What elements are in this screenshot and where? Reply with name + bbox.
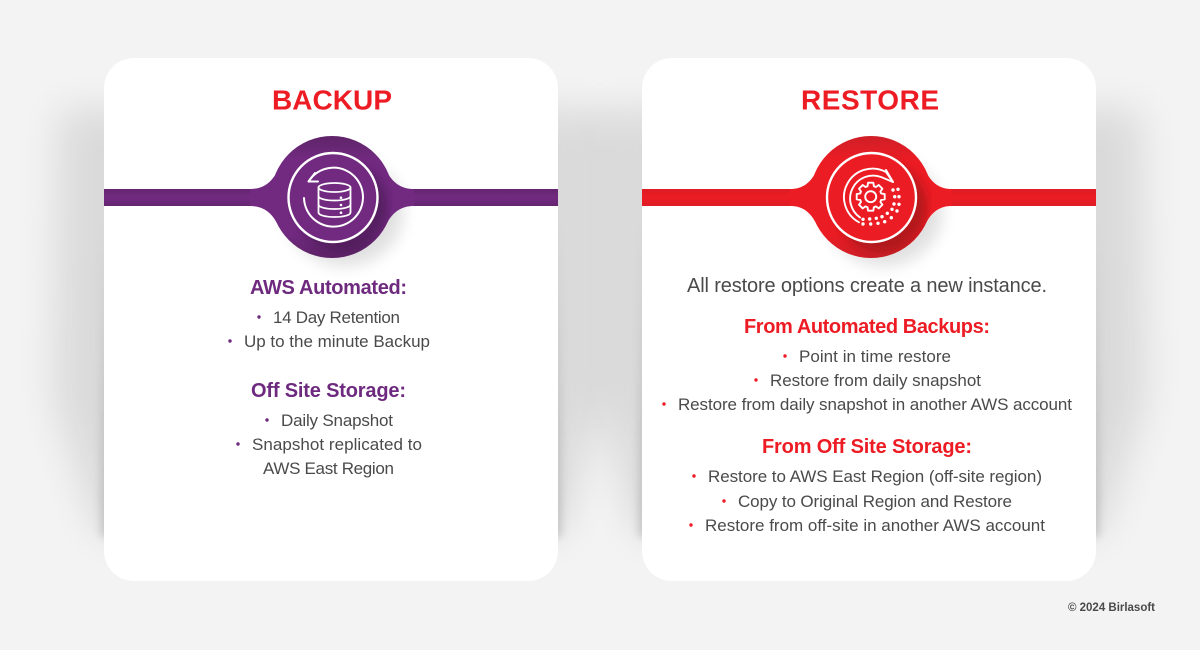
list: off site storage [236, 411, 422, 478]
heading: restore: RESTORE [801, 84, 939, 116]
list: from automated backups: Point in time restore [799, 347, 951, 366]
subheading: from automated backups: From Automated Backups: [744, 316, 990, 338]
list: from off site storage: Restore to AWS East Region (off-site region) [708, 467, 1042, 486]
list: off site storage: AWS East Region [263, 459, 394, 478]
list: off site storage: Daily Snapshot [281, 411, 393, 430]
panel: restore [600, 58, 1145, 581]
list: aws automated: 14 Day Retention [273, 308, 400, 327]
panel: backup [55, 58, 600, 581]
subheading: from off site storage: From Off Site Storage: [762, 436, 972, 458]
subheading: aws automated: AWS Automated: [250, 277, 407, 299]
list: from automated backups: Restore from daily snapshot in another AWS account [678, 395, 1072, 414]
red band with hub [642, 136, 1096, 266]
copyright: © 2024 Birlasoft [1068, 602, 1155, 614]
list: from automated backups: Restore from daily snapshot [770, 371, 981, 390]
list: from off site storage: Restore from off-site in another AWS account [705, 516, 1045, 535]
list: aws automated [228, 308, 430, 351]
list: from off site storage: Copy to Original Region and Restore [738, 492, 1012, 511]
list: aws automated: Up to the minute Backup [244, 332, 430, 351]
list: from off site storage [689, 467, 1045, 535]
icon: gear with restore arrow and dots [827, 153, 916, 242]
subheading: off site storage: Off Site Storage: [251, 380, 406, 402]
list: from automated backups [662, 347, 1072, 414]
icon: database with restore arrow [288, 153, 378, 242]
purple band with hub [104, 136, 558, 266]
list: off site storage: Snapshot replicated to [252, 435, 422, 454]
heading: backup: BACKUP [272, 84, 392, 116]
intro text: All restore options create a new instance. [687, 275, 1047, 297]
